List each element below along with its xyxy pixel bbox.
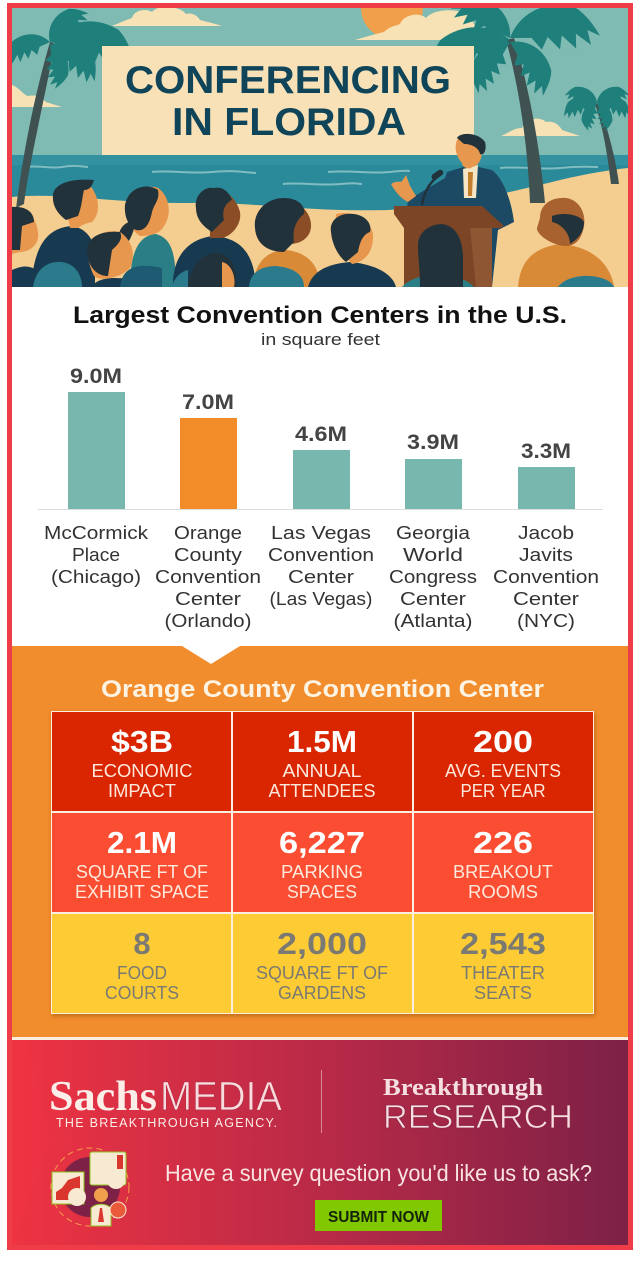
stats table: ATTENDEES [268, 781, 376, 801]
panel heading: Orange County Convention Center [101, 676, 544, 703]
bar chart: 3.9M [407, 431, 459, 454]
heading: largest convention centers: Largest Convention Centers in the U.S. [73, 302, 567, 329]
stats table: ANNUAL [282, 761, 362, 781]
stats table: ROOMS [468, 882, 538, 902]
logo: breakthrough research: RESEARCH [383, 1098, 573, 1135]
bar chart: Center [400, 588, 466, 609]
stats table: GARDENS [278, 983, 366, 1003]
subheading: in square feet [261, 330, 380, 349]
bar chart: Center [288, 566, 354, 587]
stats table: SQUARE FT OF [256, 963, 388, 983]
stats table: FOOD [117, 963, 167, 983]
bar chart: Center [175, 588, 241, 609]
survey question: Have a survey question you'd like us to ask? [165, 1160, 592, 1186]
button: submit now [315, 1200, 442, 1231]
audience [12, 180, 614, 287]
bar chart: Place [72, 544, 120, 565]
stats table: 2,000 [277, 926, 367, 961]
bar chart: Las Vegas [271, 522, 371, 543]
bar chart: 4.6M [295, 423, 347, 446]
button: submit now: SUBMIT NOW [328, 1209, 430, 1226]
palm: left [12, 8, 129, 207]
stats table: AVG. EVENTS [445, 761, 561, 781]
bar chart: 3.3M [521, 440, 571, 463]
bar chart: (Orlando) [164, 610, 252, 631]
stats table: PARKING [281, 862, 363, 882]
bar chart: (Atlanta) [394, 610, 472, 631]
stats table: SPACES [287, 882, 357, 902]
bar chart: (Las Vegas) [270, 588, 372, 609]
logo: breakthrough research: Breakthrough [383, 1075, 543, 1101]
bar chart: McCormick [44, 522, 149, 543]
icon: sun [361, 8, 423, 34]
stats table: 8 [133, 926, 151, 961]
title: IN FLORIDA [172, 101, 406, 144]
stats table: 226 [473, 825, 533, 860]
ocean [12, 165, 628, 210]
bar chart: Orange [174, 522, 242, 543]
bar chart: Center [513, 588, 579, 609]
logo: sachs media: Sachs [49, 1074, 157, 1120]
footer banner [7, 1037, 633, 1250]
bar chart: (Chicago) [51, 566, 141, 587]
stats table: THEATER [461, 963, 545, 983]
bar chart: County [174, 544, 243, 565]
stats table: 1.5M [287, 724, 357, 759]
stats table: SEATS [474, 983, 532, 1003]
bar chart: 9.0M [70, 365, 122, 388]
logo: breakthrough research [383, 1075, 573, 1135]
hero illustration: beach conference [6, 0, 630, 287]
logo: sachs media [49, 1073, 283, 1130]
icon: survey analyst [51, 1148, 129, 1226]
bar chart: 7.0M [182, 391, 234, 414]
stats table: 6,227 [279, 825, 365, 860]
stats table: COURTS [105, 983, 179, 1003]
palm: right large [430, 0, 602, 203]
panel: orange county convention center [12, 646, 628, 1037]
stats table: SQUARE FT OF [76, 862, 208, 882]
bar chart: (NYC) [517, 610, 575, 631]
podium [394, 206, 504, 287]
stats table: IMPACT [108, 781, 176, 801]
title: CONFERENCING [125, 59, 451, 102]
sand [12, 168, 628, 287]
bar chart: Jacob [518, 522, 574, 543]
clouds [12, 7, 580, 136]
stats table: 2.1M [107, 825, 177, 860]
palm: right small [564, 80, 630, 184]
logo: sachs media: THE BREAKTHROUGH AGENCY. [56, 1116, 277, 1130]
bar chart [38, 365, 603, 631]
bar chart: Congress [389, 566, 477, 587]
stats table: EXHIBIT SPACE [75, 882, 209, 902]
stats table: $3B [111, 724, 173, 759]
stats table [51, 711, 594, 1014]
stats table: BREAKOUT [453, 862, 553, 882]
logo: sachs media: MEDIA [160, 1073, 283, 1119]
stats table: PER YEAR [460, 781, 546, 801]
bar chart: Convention [268, 544, 374, 565]
bar chart: Javits [519, 544, 573, 565]
stats table: 200 [473, 724, 533, 759]
heading: largest convention centers [73, 302, 567, 349]
bar chart: Convention [493, 566, 599, 587]
bar chart: Georgia [396, 522, 471, 543]
stats table: ECONOMIC [92, 761, 193, 781]
speaker [391, 134, 514, 287]
bar chart: World [403, 544, 463, 565]
stats table: 2,543 [460, 926, 546, 961]
title [126, 66, 449, 136]
title panel [102, 46, 474, 155]
bar chart: Convention [155, 566, 261, 587]
